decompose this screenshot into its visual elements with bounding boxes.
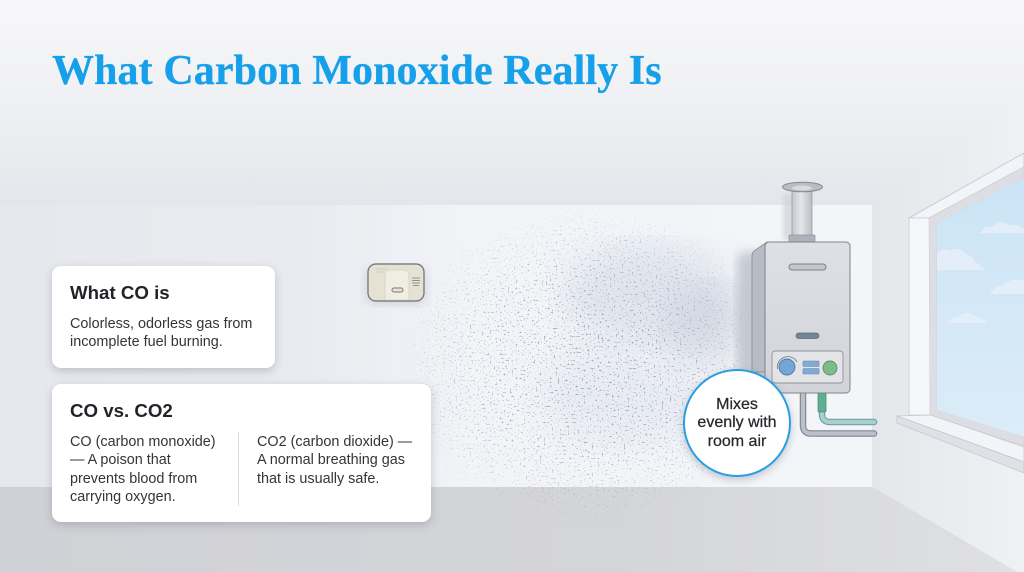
control panel (772, 351, 843, 383)
glass (937, 178, 1024, 437)
vent slot (789, 264, 826, 270)
side panel (752, 242, 767, 372)
text: CO description (70, 434, 216, 505)
green pipe (822, 405, 874, 422)
window sill (897, 415, 1024, 462)
panel: what CO is (52, 266, 275, 368)
flue collar (789, 235, 815, 243)
text: CO description: CO (carbon monoxide) (70, 434, 216, 450)
text: CO2 description: that is usually safe. (257, 471, 379, 487)
gas cloud (404, 208, 752, 519)
floor (0, 487, 1024, 572)
buttons (803, 361, 819, 366)
gray pipe (803, 392, 874, 434)
right wall (872, 98, 1024, 572)
status slot (796, 333, 819, 338)
flue (792, 187, 812, 236)
panel: CO vs CO2 (52, 384, 431, 522)
text: CO description: prevents blood from (70, 471, 197, 487)
frame top reveal (909, 153, 1024, 218)
window (897, 153, 1024, 473)
heading: CO vs CO2: CO vs. CO2 (70, 400, 173, 421)
ceiling (0, 0, 1024, 206)
text: CO2 description (257, 434, 412, 487)
green knob (823, 361, 837, 375)
back wall (0, 205, 872, 487)
text: CO2 description: CO2 (carbon dioxide) — (257, 434, 412, 450)
CO detector (366, 264, 426, 304)
flue cap (782, 182, 822, 192)
text: CO definition: Colorless, odorless gas from (70, 316, 252, 332)
water heater (737, 182, 874, 434)
valve (818, 393, 826, 412)
text: CO definition (70, 316, 252, 350)
column divider (238, 432, 239, 506)
callout: mixes evenly (683, 369, 791, 477)
front panel (765, 242, 850, 393)
callout: mixes evenly: room air (708, 433, 766, 450)
text: CO description: — A poison that (70, 452, 171, 468)
frame inner (929, 167, 1024, 446)
text: CO2 description: A normal breathing gas (257, 452, 405, 468)
callout: mixes evenly: Mixes (716, 396, 758, 413)
frame left reveal (909, 218, 930, 415)
text: CO description: carrying oxygen. (70, 489, 176, 505)
clouds (937, 222, 1024, 323)
callout: mixes evenly: evenly with (697, 414, 777, 431)
heading: what CO is: What CO is (70, 282, 170, 303)
text: CO definition: incomplete fuel burning. (70, 334, 223, 350)
title: What Carbon Monoxide Really Is (52, 48, 662, 94)
dial (779, 359, 795, 375)
heater shadow (737, 252, 777, 387)
